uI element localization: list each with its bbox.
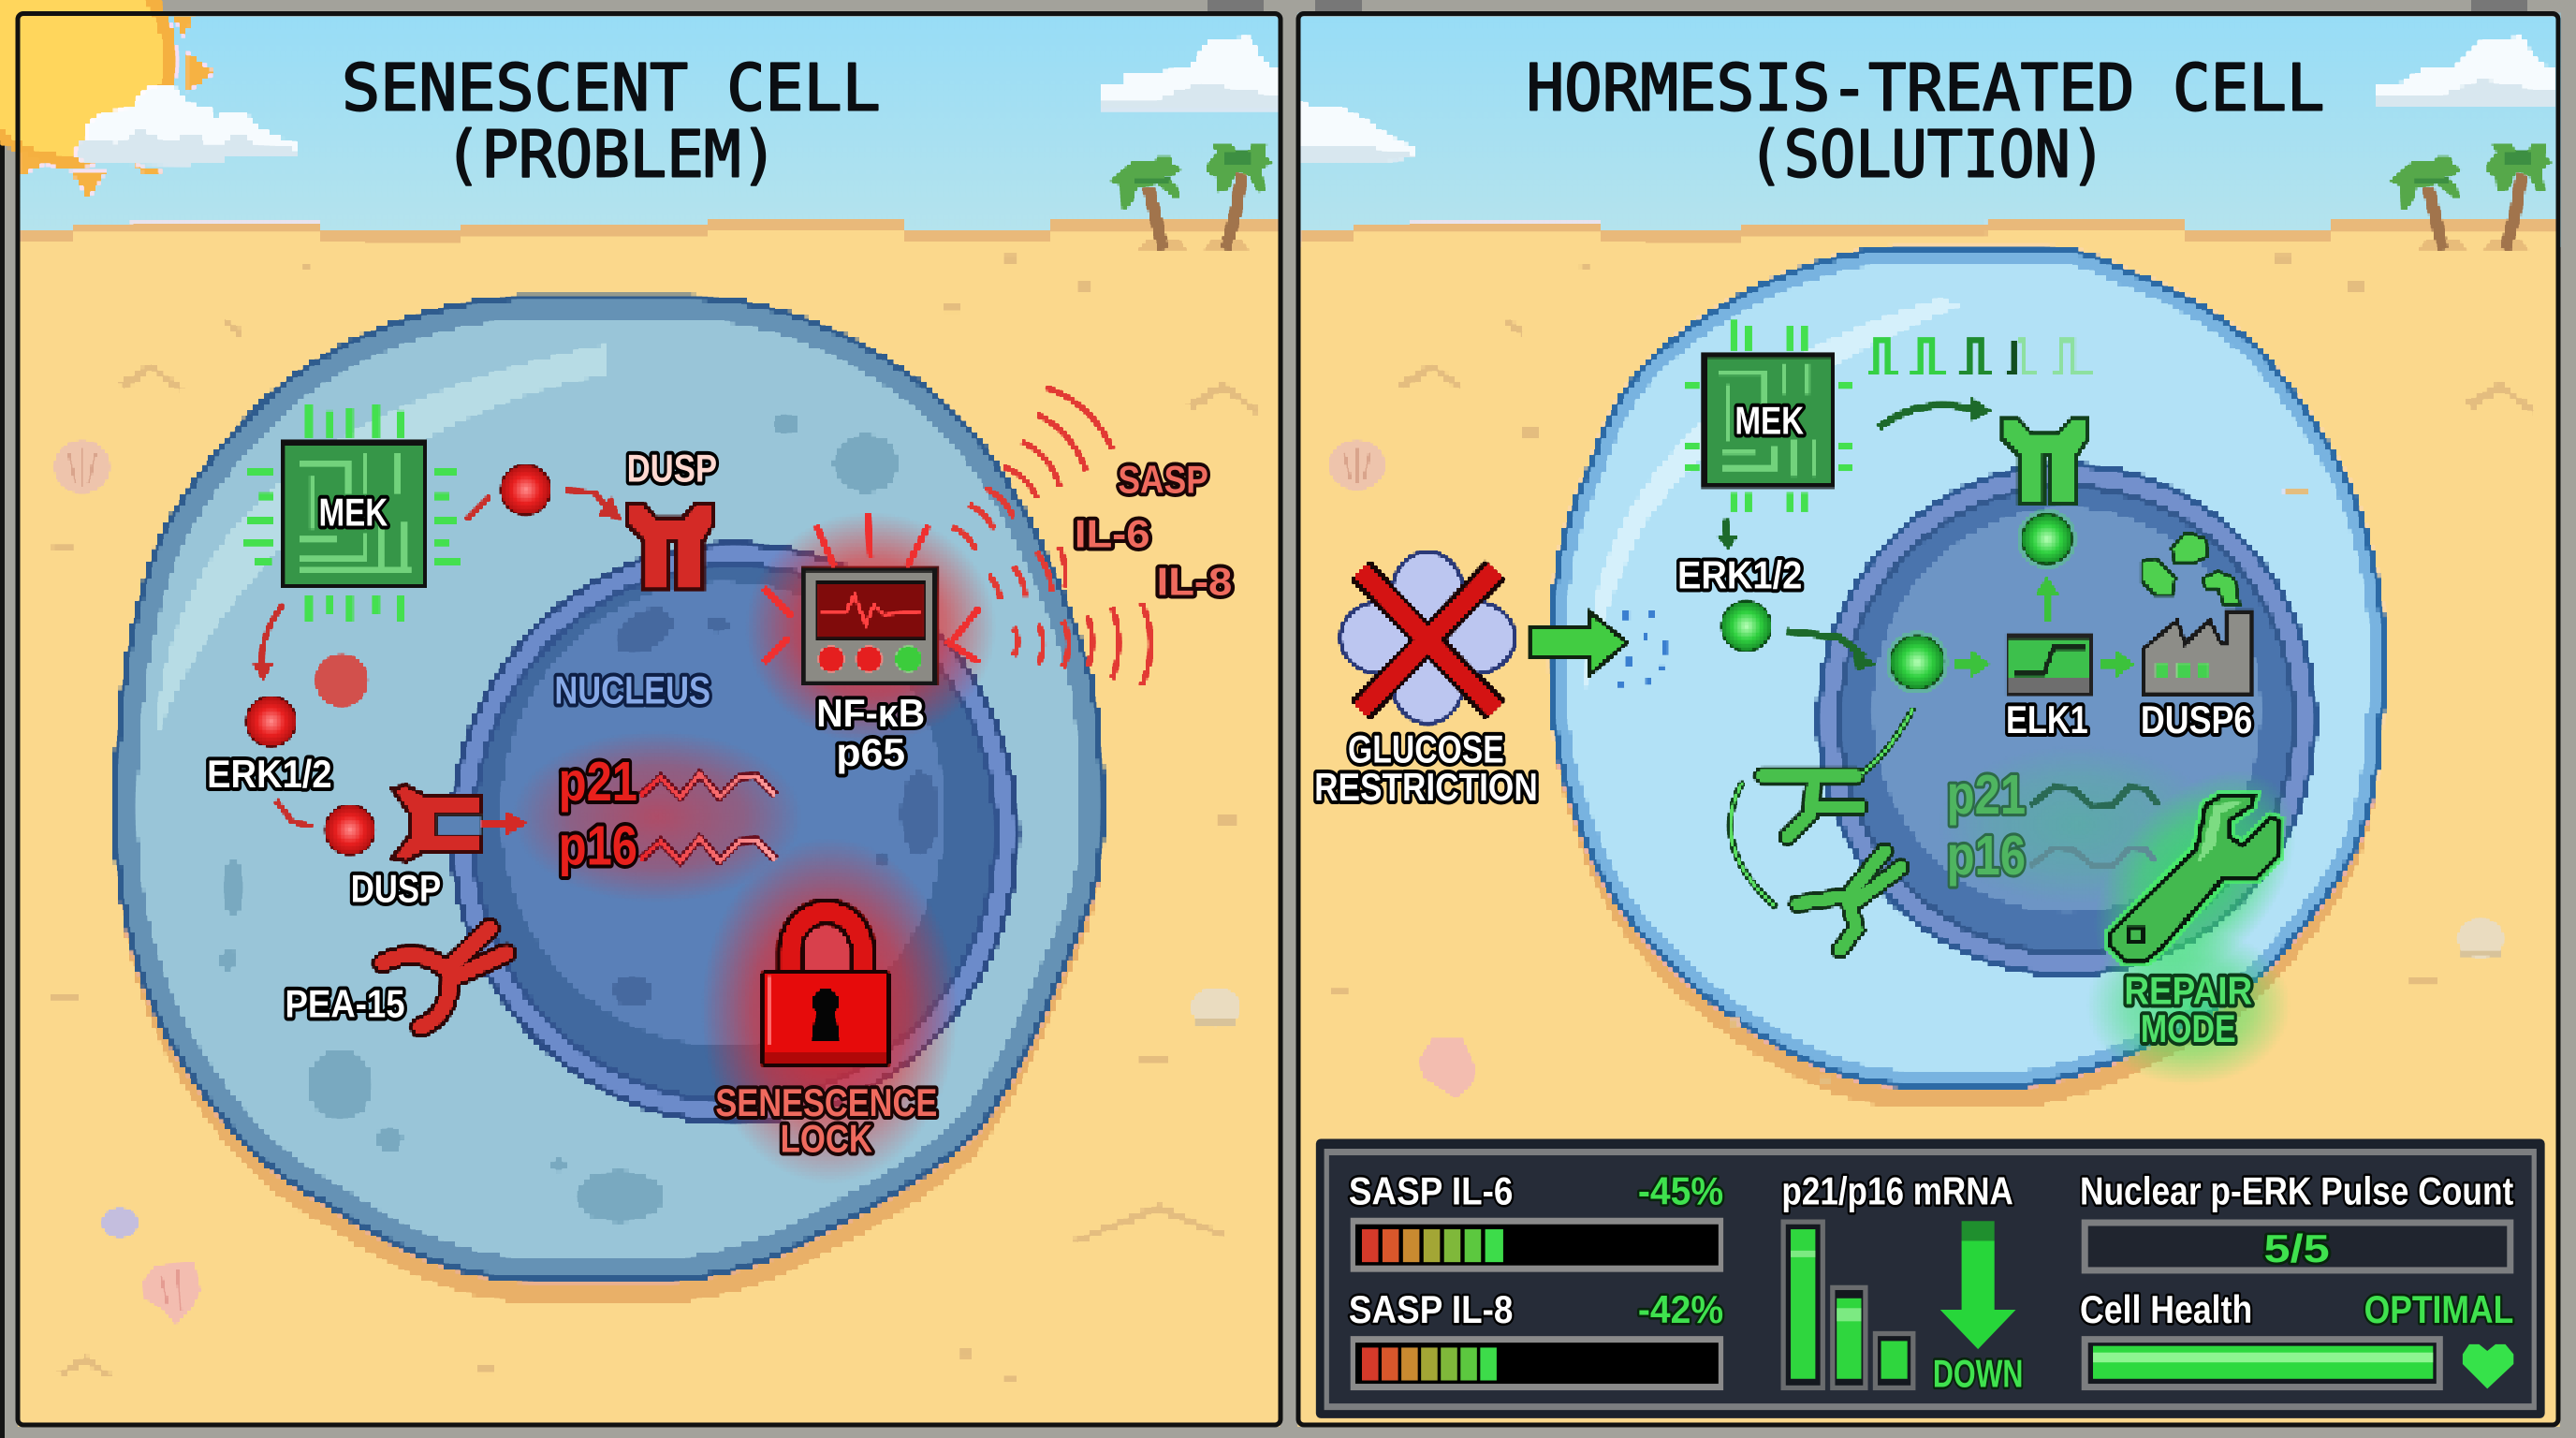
icon: green receptor bbox=[2002, 419, 2087, 503]
chart: p21/p16 mRNA: DOWN bbox=[1933, 1352, 2023, 1396]
label: lock: LOCK bbox=[781, 1117, 872, 1161]
shells bbox=[1329, 440, 2504, 1098]
palm trees bbox=[1110, 144, 1271, 250]
title: senescent cell bbox=[342, 51, 881, 193]
label: nucleus: NUCLEUS bbox=[554, 668, 710, 712]
text labels, right bbox=[1314, 51, 2545, 1418]
meter: SASP IL-6 bbox=[1349, 1169, 1723, 1272]
label: ELK1: ELK1 bbox=[2006, 697, 2088, 741]
label: NF-kB: NF-κB bbox=[816, 691, 925, 735]
label: MEK: MEK bbox=[318, 491, 388, 535]
title: hormesis-treated cell: HORMESIS-TREATED CELL bbox=[1526, 51, 2324, 126]
label: DUSP6: DUSP6 bbox=[2141, 697, 2252, 741]
icon: NF-kB monitor bbox=[764, 513, 979, 685]
meter: nuclear p-ERK pulse count bbox=[2080, 1169, 2513, 1273]
cell shadow bbox=[1551, 271, 2385, 1108]
arrow: curved to receptor bbox=[1880, 398, 1991, 427]
beach scene and cell body, left bbox=[0, 0, 1278, 1427]
title: hormesis-treated cell bbox=[1526, 51, 2324, 193]
chart: p21/p16 mRNA: p21/p16 mRNA bbox=[1781, 1169, 2013, 1213]
label: p21 faded: p21 bbox=[1947, 763, 2026, 826]
pulse train bbox=[1868, 340, 2093, 373]
label: ERK1/2: ERK1/2 bbox=[207, 752, 332, 796]
panel: senescent cell (problem) bbox=[0, 0, 1278, 1427]
label: glucose: GLUCOSE bbox=[1348, 727, 1504, 771]
label: repair: REPAIR bbox=[2124, 969, 2252, 1013]
meter: SASP IL-8: -42% bbox=[1638, 1287, 1723, 1331]
meter: SASP IL-6: SASP IL-6 bbox=[1349, 1169, 1513, 1213]
icon: PEA-15 lower bbox=[1797, 851, 1901, 950]
arrow: glucose to cell bbox=[1531, 611, 1667, 687]
label: p65: p65 bbox=[836, 730, 905, 774]
icon: ELK1 switch bbox=[2006, 635, 2093, 696]
label: p16: p16 bbox=[559, 814, 637, 876]
icon: senescence lock bbox=[761, 912, 890, 1068]
mRNA waves bbox=[640, 774, 775, 861]
label: MEK: MEK bbox=[1734, 398, 1805, 442]
label: IL-6: IL-6 bbox=[1075, 512, 1150, 556]
shells bbox=[54, 440, 1240, 1325]
icon: DUSP receptor, top bbox=[627, 503, 713, 588]
icon: DUSP receptor, sideways with arrow bbox=[392, 785, 527, 861]
meter: SASP IL-8: SASP IL-8 bbox=[1349, 1287, 1513, 1331]
icons and molecules, left bbox=[54, 144, 1271, 1325]
icon: PEA-15 upper bbox=[1731, 710, 1912, 905]
label: DUSP top: DUSP bbox=[627, 446, 717, 490]
beach scene and cell body, right bbox=[1298, 15, 2559, 1427]
ERK balls and arrows bbox=[1717, 509, 2134, 694]
mRNA waves, faded bbox=[2030, 787, 2159, 866]
phospho-ERK balls and arrows bbox=[246, 465, 621, 855]
icon: MEK chip bbox=[243, 404, 460, 622]
icon: wrench bbox=[2111, 796, 2279, 961]
title: hormesis-treated cell: (SOLUTION) bbox=[1748, 118, 2106, 193]
title: senescent cell: SENESCENT CELL bbox=[342, 51, 881, 126]
green glow: repair bbox=[1939, 733, 2335, 1085]
meter: cell health bbox=[2080, 1287, 2513, 1390]
meter: cell health: OPTIMAL bbox=[2364, 1287, 2513, 1331]
meter: nuclear p-ERK pulse count: 5/5 bbox=[2264, 1226, 2330, 1270]
icon: heart bbox=[2463, 1344, 2513, 1388]
label: ERK1/2: ERK1/2 bbox=[1677, 552, 1802, 596]
label: mode: MODE bbox=[2141, 1006, 2236, 1050]
label: DUSP lower: DUSP bbox=[351, 867, 441, 911]
label: PEA-15: PEA-15 bbox=[285, 982, 405, 1026]
meter: SASP IL-6: -45% bbox=[1638, 1169, 1723, 1213]
label: restriction: RESTRICTION bbox=[1314, 765, 1538, 809]
HUD: results dashboard bbox=[1316, 1138, 2545, 1418]
palm trees bbox=[2391, 144, 2552, 250]
text labels, left bbox=[207, 51, 1232, 1161]
icon: PEA-15 bbox=[383, 929, 506, 1027]
title: senescent cell: (PROBLEM) bbox=[445, 118, 778, 193]
meter: cell health: Cell Health bbox=[2080, 1287, 2252, 1331]
signal waves: SASP emission bbox=[953, 388, 1150, 685]
panel: hormesis-treated cell (solution) bbox=[1298, 15, 2559, 1427]
label: p21: p21 bbox=[559, 750, 637, 813]
label: p16 faded: p16 bbox=[1947, 824, 2026, 887]
icon: glucose with red X bbox=[1340, 552, 1515, 723]
icon: MEK chip bbox=[1686, 320, 1852, 511]
red glows bbox=[513, 513, 996, 1183]
label: senescence: SENESCENCE bbox=[715, 1080, 937, 1124]
meter: SASP IL-8 bbox=[1349, 1287, 1723, 1390]
cell shadow bbox=[115, 320, 1102, 1303]
chart: p21/p16 mRNA bbox=[1781, 1169, 2023, 1396]
icons and molecules, right bbox=[1329, 144, 2552, 1098]
icon: DUSP6 factory bbox=[2144, 611, 2250, 694]
protein blobs bbox=[2143, 533, 2239, 605]
label: SASP: SASP bbox=[1118, 458, 1208, 502]
label: IL-8: IL-8 bbox=[1157, 559, 1232, 603]
